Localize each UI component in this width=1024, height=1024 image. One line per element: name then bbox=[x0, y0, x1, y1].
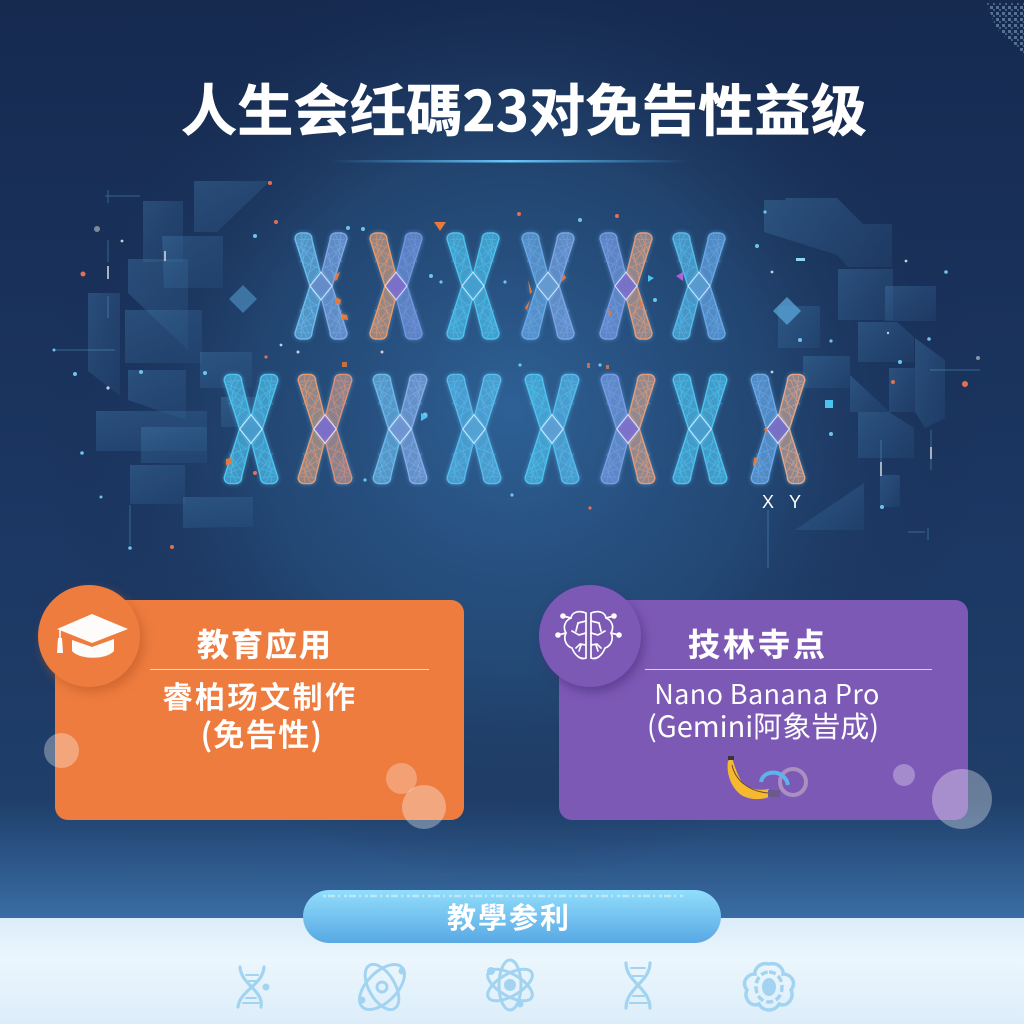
icon: graduation cap bbox=[38, 585, 140, 687]
bubble bbox=[44, 733, 79, 768]
icon: flower cell bbox=[745, 964, 793, 1010]
icon: atom two bbox=[483, 960, 537, 1010]
bubble bbox=[932, 769, 992, 829]
chromosome row two bbox=[224, 374, 805, 484]
icon: atom one bbox=[352, 957, 412, 1017]
glass panels left bbox=[88, 181, 270, 528]
icon: banana and rings bbox=[728, 756, 808, 800]
label: Y: Y bbox=[789, 492, 801, 512]
text: education line two: (免告性) bbox=[201, 710, 323, 755]
bubble bbox=[386, 763, 417, 794]
heading: technology: 技林寺点 bbox=[688, 620, 828, 666]
bubble bbox=[402, 785, 446, 829]
panel: technology bbox=[559, 600, 968, 820]
divider: education bbox=[150, 668, 429, 670]
chromosome array bbox=[222, 230, 808, 486]
banner pill bbox=[303, 890, 721, 943]
glass panels right bbox=[764, 198, 945, 530]
icon: dna one bbox=[238, 967, 270, 1007]
heading: education: 教育应用 bbox=[197, 620, 333, 666]
decorative lines bbox=[55, 190, 980, 568]
title: 人生会纴碼23对免告性益级 bbox=[181, 67, 867, 148]
icon: dna two bbox=[626, 963, 650, 1008]
text: technology line two: (Gemini阿象旹成) bbox=[647, 704, 879, 746]
panel: education bbox=[55, 600, 464, 820]
text: education line one: 睿柏玚文制作 bbox=[162, 673, 358, 717]
banner text: 教學参利 bbox=[447, 895, 571, 937]
bubble bbox=[893, 764, 915, 786]
icon row bbox=[236, 958, 796, 1012]
label: X: X bbox=[762, 492, 774, 512]
icon: brain bbox=[539, 585, 641, 687]
chromosome row one bbox=[295, 233, 725, 339]
corner texture bbox=[985, 3, 1024, 56]
title underline glow bbox=[330, 160, 690, 162]
divider: technology bbox=[645, 668, 932, 670]
particles bbox=[52, 181, 980, 550]
bottom band bbox=[0, 918, 1024, 1024]
text: technology line one: Nano Banana Pro bbox=[654, 673, 880, 712]
